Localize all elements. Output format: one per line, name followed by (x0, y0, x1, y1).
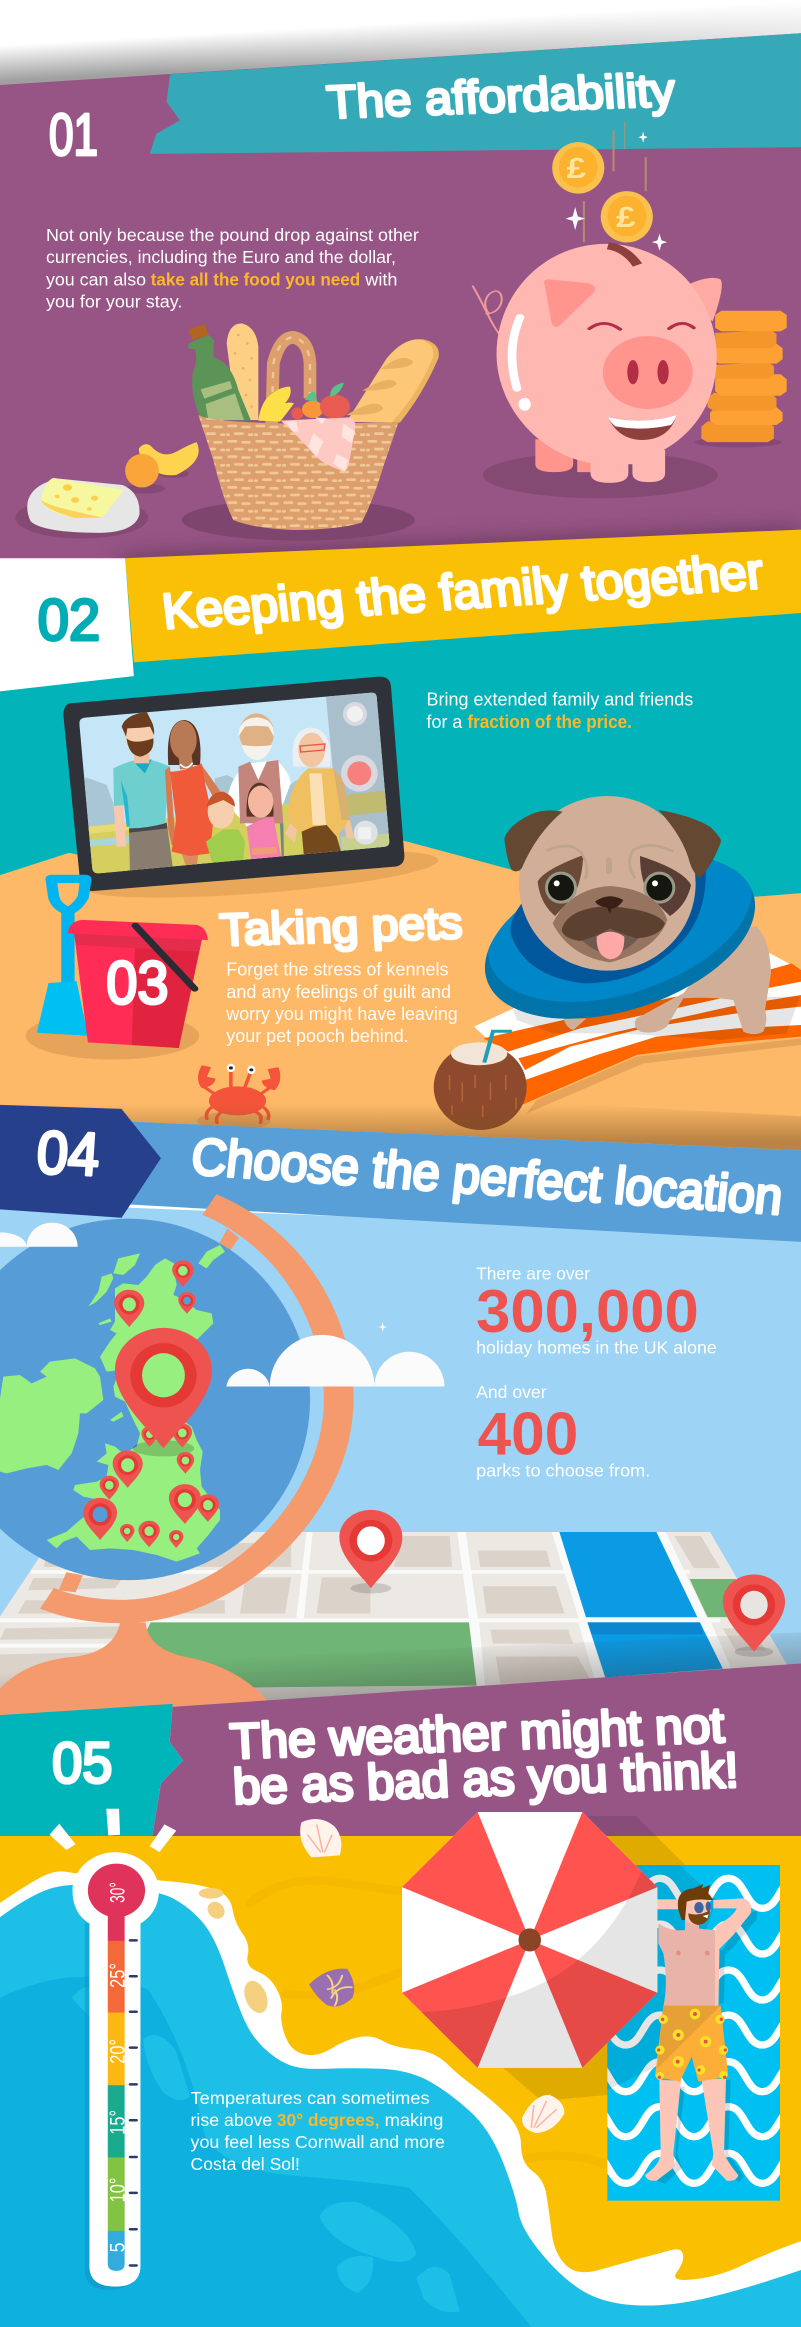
clouds (0, 1223, 444, 1387)
tablet with family photo (63, 677, 404, 891)
title banner (102, 1121, 801, 1242)
temperature text: 30° degrees, (277, 2111, 380, 2130)
number 01: 01 (49, 102, 98, 168)
towel and sunbathing man (607, 1865, 780, 2201)
description text: take all the food you need (151, 269, 360, 289)
thermometer scale labels: 10° (106, 2178, 130, 2202)
number 04: 04 (35, 1119, 102, 1188)
grandfather in the photo (227, 713, 291, 858)
thermometer scale labels: 25° (106, 1963, 130, 1988)
panel: choose the perfect location (0, 1074, 801, 1733)
purple bottom shadow (123, 527, 801, 579)
woman in the photo (165, 720, 222, 868)
falling coins: £ (616, 202, 636, 233)
description text: Bring extended family and friends (427, 689, 693, 710)
sky background (0, 1203, 801, 1733)
falling coins (552, 121, 667, 251)
number tab (0, 1704, 183, 1836)
deep sea (0, 1977, 531, 2327)
statistics text: And over (476, 1383, 547, 1402)
temperature text: Temperatures can sometimes (191, 2089, 430, 2109)
globe stand (0, 1205, 339, 1733)
sand pebbles (199, 1888, 272, 2015)
purple background (0, 33, 801, 562)
taking pets text: Forget the stress of kennels (226, 959, 449, 980)
grandmother in the photo (285, 728, 354, 857)
sea (0, 1885, 801, 2327)
shell lower (522, 2095, 564, 2133)
pug body (563, 927, 771, 1034)
temperature text: Costa del Sol! (191, 2155, 300, 2174)
temperature text (191, 2089, 445, 2174)
towel (607, 1865, 780, 2201)
map plane (0, 1532, 801, 1733)
pug head (504, 796, 721, 971)
number tab (0, 558, 134, 691)
thermometer scale labels: 5 (106, 2242, 130, 2252)
number 03 bucket and spade (26, 879, 208, 1060)
taking pets text: your pet pooch behind. (226, 1025, 409, 1046)
top page shadow (0, 0, 801, 86)
taking pets heading: Taking pets (218, 898, 464, 956)
pug on a beach towel (464, 796, 801, 1113)
thermometer (73, 1852, 159, 2290)
man in the photo (113, 712, 173, 873)
description text (427, 689, 693, 732)
sea highlights (72, 1984, 460, 2312)
piggy bank (473, 244, 722, 498)
beach towel (474, 953, 801, 1113)
coin stack (695, 311, 787, 447)
location pins on the map (83, 1260, 219, 1548)
title banner (125, 530, 801, 662)
number arrow (0, 1105, 161, 1218)
picnic basket (182, 323, 439, 541)
title banner (152, 1663, 801, 1836)
panel: keeping the family together and taking pets (0, 530, 801, 1190)
statistics text: parks to choose from. (476, 1462, 650, 1481)
map pin centre (339, 1510, 402, 1593)
title (229, 1697, 740, 1814)
panel: the weather might not be as bad (0, 1663, 801, 2327)
panel: the affordability (0, 33, 801, 579)
temperature text: making (385, 2111, 443, 2130)
description text: you for your stay. (46, 291, 182, 312)
number 05: 05 (52, 1730, 112, 1795)
thermometer scale labels (106, 1882, 130, 2252)
foam (0, 1871, 801, 2327)
statistics text (476, 1265, 717, 1481)
beach umbrella (398, 1812, 664, 2076)
taking pets text (225, 959, 458, 1046)
shell spiral (309, 1969, 354, 2007)
map bottom shadow (0, 1632, 801, 1733)
description text: fraction of the price. (467, 711, 632, 732)
statistics text: holiday homes in the UK alone (476, 1339, 717, 1358)
man (645, 1884, 757, 2184)
statistics text: 400 (478, 1400, 578, 1468)
description text: for a (427, 711, 463, 732)
sand background (0, 1835, 801, 2327)
statistics text: 300,000 (476, 1278, 699, 1345)
sand shadow (0, 1074, 801, 1150)
shell top (300, 1819, 341, 1857)
taking pets text: and any feelings of guilt and (226, 981, 451, 1002)
map of the UK and Ireland (0, 1245, 225, 1562)
map pin right (723, 1575, 785, 1657)
number 02: 02 (38, 588, 100, 653)
boy in the photo (206, 792, 245, 867)
tablet shadow (80, 841, 441, 907)
swim ring (484, 860, 756, 1019)
teal background (0, 563, 801, 976)
description text: currencies, including the Euro and the dollar, (46, 247, 396, 267)
description text: you can also (46, 269, 146, 289)
sun rays (50, 1809, 176, 1852)
description text: with (364, 269, 397, 289)
sand (0, 841, 801, 1190)
thermometer scale labels: 15° (106, 2110, 130, 2135)
crab (197, 1064, 280, 1130)
umbrella shadow (503, 1816, 715, 2101)
title banner (150, 33, 801, 154)
description text: Not only because the pound drop against other (46, 225, 419, 245)
girl in the photo (246, 783, 282, 865)
temperature text: you feel less Cornwall and more (191, 2133, 445, 2152)
temperature text: rise above (191, 2111, 272, 2130)
falling coins: £ (567, 153, 586, 184)
thermometer scale labels: 20° (106, 2039, 130, 2064)
statistics text: There are over (476, 1265, 590, 1284)
description text (46, 225, 419, 312)
fruit and cheese plate (15, 442, 199, 539)
title: The affordability (325, 64, 677, 129)
globe (0, 1219, 310, 1580)
coconut (434, 1031, 527, 1130)
number 03 bucket and spade: 03 (106, 950, 169, 1017)
sand ripples (250, 1880, 608, 2165)
taking pets text: worry you might have leaving (225, 1003, 458, 1024)
thermometer scale labels: 30° (106, 1882, 130, 1903)
